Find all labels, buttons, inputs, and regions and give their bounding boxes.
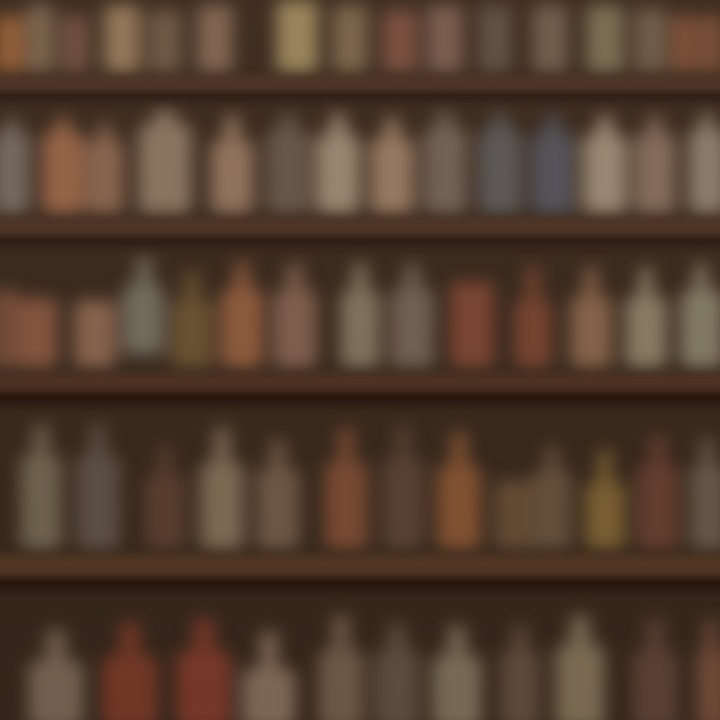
shelf 1 (0, 76, 720, 100)
bottles: second row (0, 110, 720, 214)
bottles: fourth row (20, 425, 720, 550)
shelf 4 (0, 554, 720, 591)
bottles: top row (0, 0, 720, 73)
bottles: third row (0, 258, 720, 368)
shelf 2 (0, 218, 720, 246)
shelf 3 (0, 373, 720, 405)
bottles: bottom row (28, 615, 720, 720)
